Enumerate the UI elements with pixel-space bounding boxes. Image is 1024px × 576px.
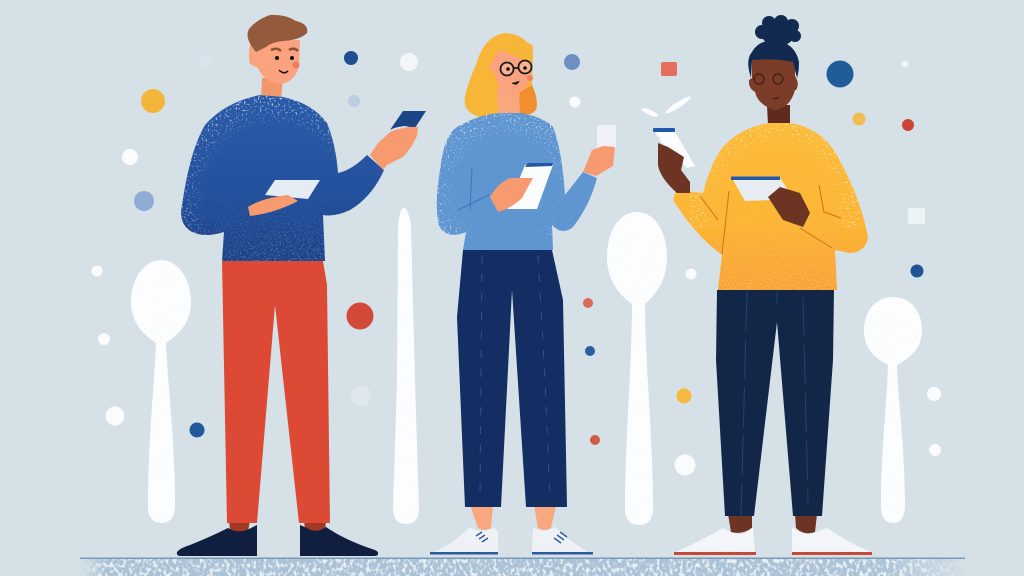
man hair [248, 15, 307, 52]
spoon 3 [864, 297, 922, 523]
man face details [271, 49, 300, 73]
woman shoes [430, 527, 593, 554]
woman legs skin [470, 505, 556, 530]
third woman hair [748, 15, 801, 78]
woman tablet [507, 163, 553, 209]
spoon 2 [607, 212, 667, 525]
third woman legs [716, 290, 834, 516]
sparkle marks [641, 94, 692, 119]
person 2: woman in light blue sweater [430, 33, 616, 554]
woman hair back [465, 33, 536, 117]
man head [249, 40, 300, 84]
knife [393, 208, 419, 524]
third woman tablet [731, 176, 790, 201]
person 1: man in blue sweater [170, 15, 426, 556]
white cutlery shapes [130, 205, 930, 527]
woman sweater [430, 110, 597, 250]
spoon 1 [131, 260, 191, 523]
third woman ankles [728, 514, 817, 533]
man sweater [181, 95, 384, 261]
woman pants stitching [480, 255, 550, 500]
floor with speckled shadow [80, 558, 970, 576]
third woman head [749, 56, 798, 110]
woman fringe [493, 39, 533, 70]
woman right hand [583, 146, 615, 176]
woman glasses [500, 60, 532, 76]
decorative dots [92, 51, 941, 476]
man shoes [177, 525, 378, 556]
woman neck [497, 88, 520, 114]
man phone [390, 111, 426, 130]
man right hand [370, 127, 418, 170]
third woman phone [653, 128, 695, 168]
man tablet [265, 180, 320, 199]
third woman shoes [674, 527, 872, 555]
third woman sweater [673, 118, 868, 292]
woman card [597, 125, 616, 148]
man left hand [248, 195, 298, 216]
third woman left hand [658, 143, 690, 193]
woman head [489, 50, 532, 95]
third woman right hand [768, 187, 810, 227]
third woman pants stitching [741, 291, 808, 516]
woman pants [457, 250, 567, 507]
person 3: woman in yellow sweater [653, 15, 872, 555]
woman face details [506, 66, 533, 84]
man neck [261, 78, 283, 100]
woman left hand [490, 178, 533, 212]
man ankles [229, 520, 326, 534]
man legs [222, 261, 330, 523]
third woman face details [754, 74, 783, 99]
third woman neck [767, 105, 790, 125]
